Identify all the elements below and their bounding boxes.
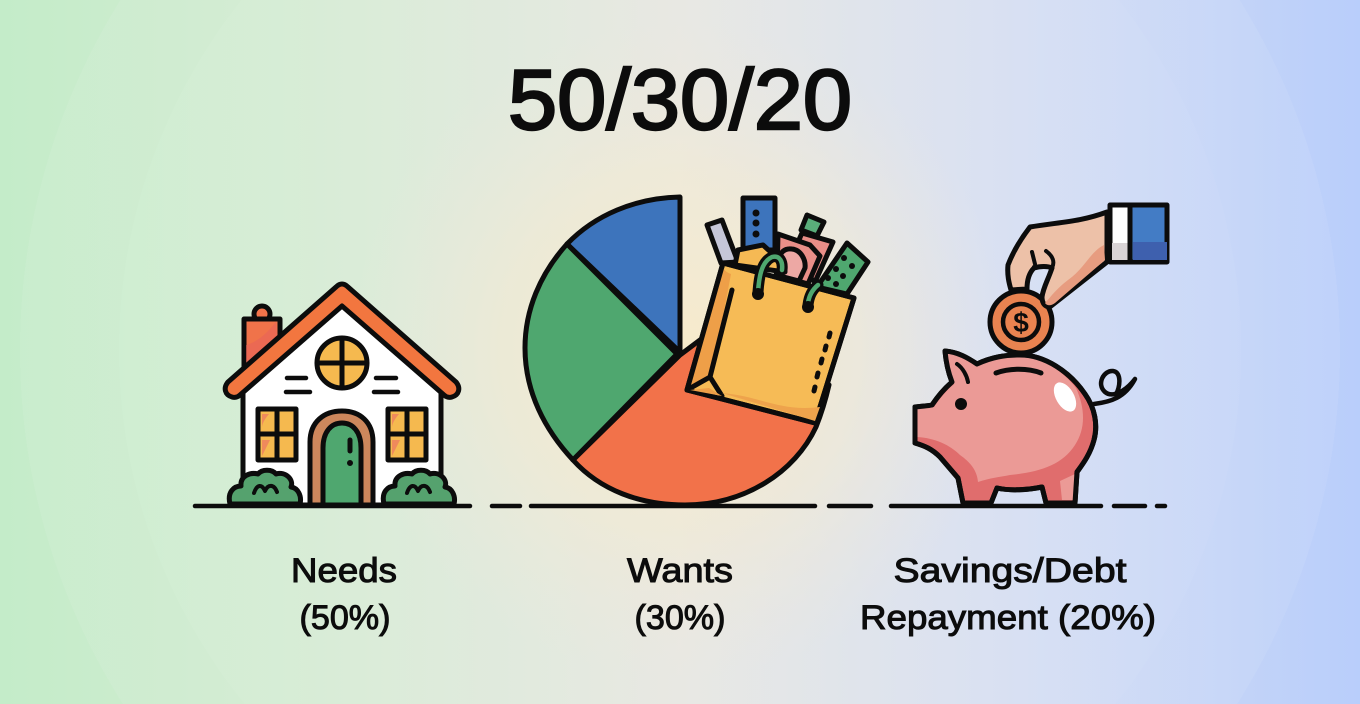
icon: piggy bank <box>915 205 1167 503</box>
label: wants: (30%) <box>634 599 726 637</box>
hand <box>1008 212 1107 307</box>
label: wants <box>627 552 733 637</box>
pig light area <box>917 353 1083 482</box>
finger marks <box>1032 251 1053 268</box>
label: wants: Wants <box>627 552 733 590</box>
pig outline <box>915 351 1096 503</box>
icon: house <box>225 284 459 505</box>
left window <box>258 409 296 460</box>
pig body <box>915 351 1096 503</box>
bag side <box>687 263 731 390</box>
wall lines <box>286 378 398 392</box>
shirt cuff <box>1110 205 1130 262</box>
label: needs: Needs <box>291 552 397 590</box>
label: savings/debt repayment: Repayment (20%) <box>860 599 1156 637</box>
ground line <box>195 504 1165 508</box>
label: needs: (50%) <box>300 599 390 637</box>
green card <box>817 243 868 294</box>
bag bottom shade <box>722 393 820 421</box>
bush marks <box>254 486 430 493</box>
pig leg highlight <box>1060 474 1075 500</box>
door <box>310 411 373 505</box>
coin slot <box>996 369 1041 373</box>
hand shade <box>1045 245 1105 305</box>
bag handles <box>758 257 782 292</box>
title: 50/30/20 <box>508 53 852 148</box>
label: savings/debt repayment: Savings/Debt <box>894 552 1127 590</box>
bottle cap <box>801 215 824 236</box>
roof <box>225 284 459 397</box>
pig highlight <box>1049 379 1081 415</box>
label: needs <box>291 552 397 637</box>
orange slice <box>573 340 829 505</box>
blue item <box>743 198 775 250</box>
left bush <box>229 470 301 504</box>
round window <box>317 338 367 388</box>
pink pouch <box>776 249 805 281</box>
icon: shopping bag <box>687 198 868 423</box>
roof shadow <box>246 302 438 392</box>
coin: $ <box>1013 307 1029 338</box>
label: savings/debt repayment <box>860 552 1156 637</box>
walls <box>243 300 441 505</box>
chimney <box>244 306 280 372</box>
silver item <box>707 220 738 263</box>
chart: pie <box>525 197 829 505</box>
bag back <box>735 245 785 272</box>
bag front <box>687 263 854 423</box>
bottle body <box>790 233 833 282</box>
tail <box>1094 371 1135 404</box>
pink card <box>777 234 820 284</box>
bag stitches <box>814 333 830 391</box>
right window <box>388 409 426 460</box>
green slice <box>525 244 677 460</box>
sleeve <box>1130 205 1167 262</box>
coin <box>990 291 1052 353</box>
pig eye <box>955 398 967 410</box>
blue slice <box>567 197 680 352</box>
pig ear fold <box>957 364 968 382</box>
right bush <box>383 470 455 504</box>
